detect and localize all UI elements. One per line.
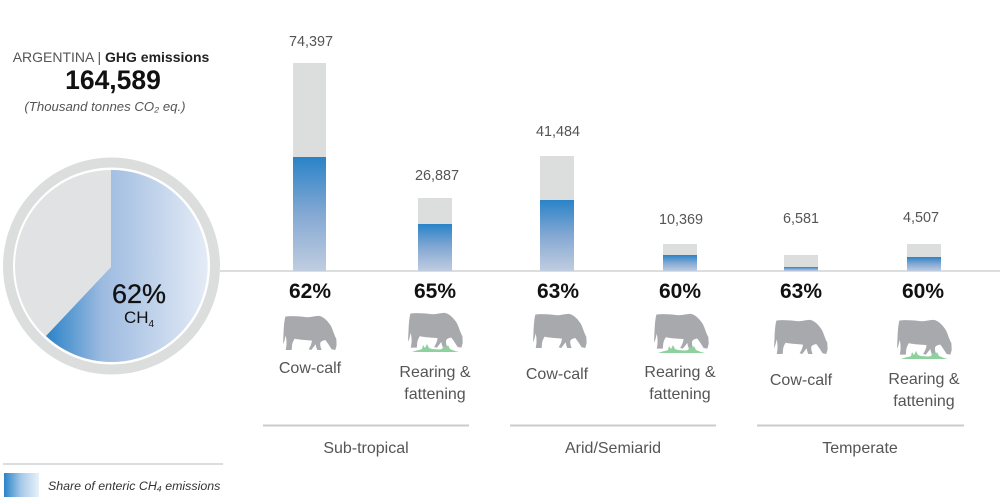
- heading: country and total emissions: [13, 49, 210, 114]
- icon: cow sub-tropical rearing: [408, 313, 463, 352]
- percent labels: 62%: [289, 280, 331, 303]
- category labels: Rearing &: [644, 364, 716, 381]
- category labels: Rearing &: [888, 371, 960, 388]
- icon: cow sub-tropical cow-calf: [283, 316, 337, 350]
- category labels: [279, 360, 960, 410]
- bar values: 6,581: [783, 211, 819, 227]
- bar: sub-tropical rearing: [418, 198, 452, 271]
- legend text: Share of enteric CH₄ emissions: [48, 479, 220, 493]
- pie value: 62%: [112, 279, 166, 309]
- icon: cow temperate cow-calf: [774, 320, 828, 354]
- group: arid/semiarid: Arid/Semiarid: [565, 440, 661, 457]
- icon: cow temperate rearing: [897, 320, 952, 359]
- category labels: fattening: [893, 393, 955, 410]
- pie chart: CH4 share: [8, 162, 215, 370]
- category labels: Cow-calf: [279, 360, 342, 377]
- pie gas label: 4: [148, 319, 154, 330]
- percent labels: 65%: [414, 280, 456, 303]
- bar: temperate rearing: [907, 244, 941, 271]
- percent labels: 60%: [659, 280, 701, 303]
- pie gas label: CH: [124, 308, 148, 327]
- unit note: (Thousand tonnes CO₂ eq.): [24, 99, 186, 114]
- bar: sub-tropical cow-calf: [293, 63, 326, 271]
- category labels: Rearing &: [399, 364, 471, 381]
- bar: arid rearing: [663, 244, 697, 271]
- group: temperate: Temperate: [822, 440, 898, 457]
- category labels: Cow-calf: [526, 366, 589, 383]
- group: sub-tropical: Sub-tropical: [323, 440, 409, 457]
- legend: [3, 463, 223, 497]
- bar values: 41,484: [536, 124, 580, 140]
- icon: cow arid cow-calf: [533, 314, 587, 348]
- bar values: 26,887: [415, 168, 459, 184]
- category labels: fattening: [404, 386, 466, 403]
- legend swatch: [4, 473, 39, 497]
- bar values: 74,397: [289, 34, 333, 50]
- percent labels: 63%: [780, 280, 822, 303]
- category labels: Cow-calf: [770, 372, 833, 389]
- bar chart: [293, 63, 941, 271]
- percent labels: 63%: [537, 280, 579, 303]
- heading label: ARGENTINA | GHG emissions: [13, 49, 210, 65]
- icon: cow arid rearing: [654, 314, 709, 353]
- bar values: 4,507: [903, 210, 939, 226]
- percent labels: 60%: [902, 280, 944, 303]
- bar: arid cow-calf: [540, 156, 574, 271]
- bar values: 10,369: [659, 212, 703, 228]
- percent labels: [289, 280, 944, 303]
- baseline axis: [220, 270, 1000, 272]
- total value: 164,589: [65, 65, 161, 95]
- category labels: fattening: [649, 386, 711, 403]
- bar: temperate cow-calf: [784, 255, 818, 271]
- bar values: [289, 34, 939, 228]
